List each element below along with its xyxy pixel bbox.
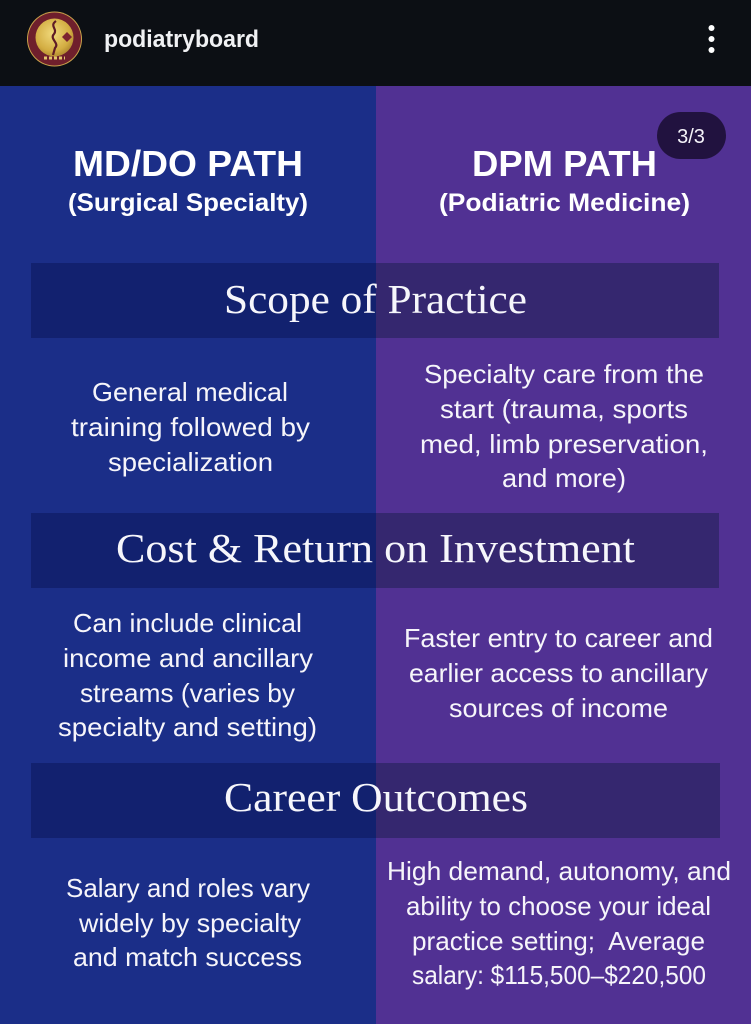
text: MD/DO career outcomes: and match success: [73, 942, 302, 972]
text: MD/DO scope of practice: [71, 377, 310, 477]
text: DPM scope of practice: Specialty care from the: [424, 359, 704, 389]
text: MD/DO scope of practice: General medical: [92, 377, 288, 407]
text: DPM cost and return: Faster entry to career and: [404, 623, 713, 653]
text: DPM career outcomes: High demand, autonomy, and: [387, 856, 731, 886]
heading: MD/DO path: [68, 143, 308, 217]
icon: account seal logo: [27, 12, 82, 66]
text: MD/DO career outcomes: [66, 873, 310, 972]
slide counter badge: [657, 112, 726, 159]
text: DPM scope of practice: med, limb preservation,: [420, 429, 708, 459]
text: MD/DO cost and return: Can include clinical: [73, 608, 302, 638]
text: DPM career outcomes: practice setting; Average: [412, 926, 705, 956]
text: MD/DO cost and return: specialty and setting): [58, 712, 317, 742]
text: DPM scope of practice: [420, 359, 708, 493]
panel: DPM column background: [376, 86, 751, 1024]
section band: Cost and Return on Investment: [31, 513, 719, 588]
heading: DPM path: (Podiatric Medicine): [439, 189, 690, 217]
heading: MD/DO path: (Surgical Specialty): [68, 189, 308, 217]
heading: DPM path: DPM PATH: [472, 143, 657, 184]
text: MD/DO career outcomes: widely by specialty: [78, 908, 301, 938]
text: DPM career outcomes: ability to choose your ideal: [406, 891, 711, 921]
text: MD/DO cost and return: [58, 608, 317, 742]
top account bar: [0, 0, 751, 86]
slide counter badge: 3/3: [677, 126, 705, 148]
account name: podiatryboard: [104, 26, 259, 53]
section band: Scope of Practice: Scope of Practice: [224, 276, 527, 322]
text: MD/DO cost and return: income and ancillary: [63, 643, 313, 673]
text: MD/DO career outcomes: Salary and roles vary: [66, 873, 310, 903]
text: MD/DO cost and return: streams (varies by: [80, 678, 295, 708]
text: DPM cost and return: earlier access to ancillary: [409, 658, 708, 688]
text: MD/DO scope of practice: training followed by: [71, 412, 310, 442]
panel: MD/DO column background: [0, 86, 376, 1024]
section band: Career Outcomes: [31, 763, 720, 838]
text: DPM cost and return: [404, 623, 713, 723]
text: DPM career outcomes: salary: $115,500–$220,500: [412, 960, 706, 990]
text: DPM scope of practice: start (trauma, sports: [440, 394, 688, 424]
section band: Cost and Return on Investment: Cost & Return on Investment: [116, 525, 636, 571]
text: MD/DO scope of practice: specialization: [108, 447, 273, 477]
text: DPM career outcomes: [387, 856, 731, 990]
heading: MD/DO path: MD/DO PATH: [73, 143, 303, 184]
section band: Scope of Practice: [31, 263, 719, 338]
text: DPM scope of practice: and more): [502, 463, 626, 493]
text: DPM cost and return: sources of income: [449, 693, 668, 723]
icon: three-dot menu: [708, 25, 714, 53]
heading: DPM path: [439, 143, 690, 217]
section band: Career Outcomes: Career Outcomes: [224, 774, 528, 820]
